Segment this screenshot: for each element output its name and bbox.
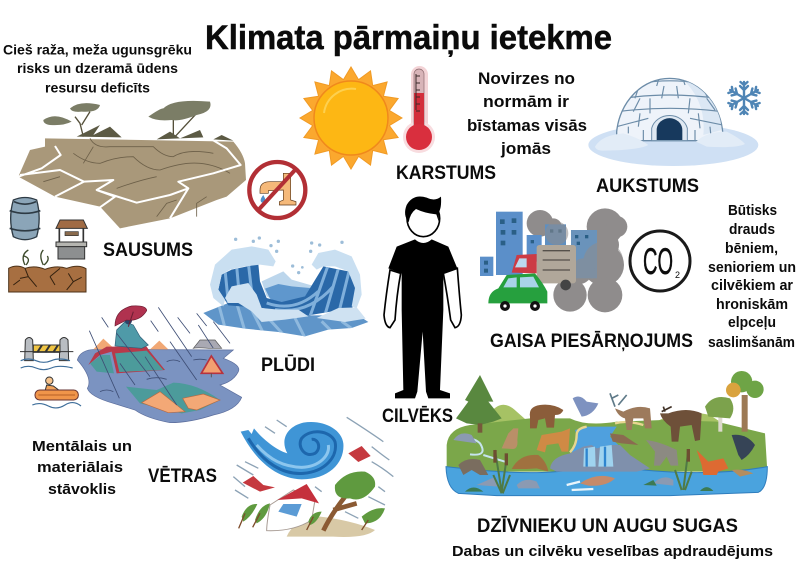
- fir tree: [456, 375, 502, 433]
- illustration: storm with swirl, house and tree: [233, 417, 393, 537]
- title: Klimata pārmaiņu ietekme: [205, 19, 612, 57]
- label: KARSTUMS: KARSTUMS: [396, 163, 496, 184]
- illustration: flooded street with person under umbrella: [77, 306, 242, 423]
- text block: vulnerable groups: cilvēkiem ar: [711, 277, 793, 294]
- icon: dry soil with sprouts: [9, 250, 86, 292]
- icon: CO2 circle: 2: [675, 270, 680, 280]
- label: DZĪVNIEKU UN AUGU SUGAS: DZĪVNIEKU UN AUGU SUGAS: [477, 516, 738, 537]
- text block: mental and material state: [32, 438, 132, 498]
- text block: vulnerable groups: hroniskām: [716, 296, 788, 313]
- icon: road barrier in water: [20, 337, 73, 370]
- icon: igloo: [588, 75, 758, 166]
- text block: deviations: normām ir: [483, 92, 569, 111]
- text block: vulnerable groups: Būtisks: [728, 202, 777, 219]
- text block: deviations: bīstamas visās: [467, 116, 587, 135]
- icon: CO2 circle: [630, 231, 690, 291]
- icon: CO2 circle: CO: [643, 241, 673, 282]
- figure: person: [384, 196, 461, 398]
- text block: vulnerable groups: bēniem,: [725, 240, 778, 257]
- text block: drought effects: Cieš raža, meža ugunsgrēku: [3, 42, 192, 58]
- text block: deviations: [467, 69, 587, 158]
- text block: nature and health threats: Dabas un cilvēku veselības apdraudējums: [452, 543, 773, 560]
- text block: vulnerable groups: drauds: [729, 221, 775, 238]
- icon: snowflake: [728, 82, 760, 114]
- illustration: cracked earth with trees: [18, 101, 246, 228]
- cattails: [493, 449, 692, 493]
- icon: stone well: [56, 220, 87, 259]
- animals: [458, 393, 755, 490]
- label: AUKSTUMS: AUKSTUMS: [596, 176, 699, 197]
- label: VĒTRAS: VĒTRAS: [148, 466, 217, 487]
- illustration: city pollution with car: [480, 208, 627, 312]
- text block: drought effects: risks un dzeramā ūdens: [17, 60, 178, 76]
- illustration: flood wave: [203, 236, 368, 338]
- label: SAUSUMS: SAUSUMS: [103, 240, 193, 261]
- text block: mental and material state: Mentālais un: [32, 438, 132, 455]
- text block: vulnerable groups: saslimšanām: [708, 334, 795, 351]
- label: PLŪDI: PLŪDI: [261, 355, 315, 376]
- text block: deviations: Novirzes no: [478, 69, 575, 88]
- broadleaf trees: [705, 371, 764, 432]
- text block: vulnerable groups: [708, 202, 796, 351]
- text block: drought effects: resursu deficīts: [45, 80, 150, 96]
- icon: water barrel: [10, 197, 40, 240]
- icon: no water tap sign: [249, 162, 305, 218]
- text block: vulnerable groups: senioriem un: [708, 259, 796, 276]
- text block: mental and material state: materiālais: [37, 459, 123, 476]
- text block: drought effects: [3, 42, 192, 96]
- icon: person in rubber boat: [32, 377, 81, 408]
- label: CILVĒKS: CILVĒKS: [382, 406, 453, 427]
- icon: sun: [300, 67, 402, 169]
- text block: deviations: jomās: [500, 139, 551, 158]
- illustration: nature scene with animals: [446, 371, 767, 496]
- text block: vulnerable groups: elpceļu: [728, 314, 776, 331]
- label: GAISA PIESĀRŅOJUMS: GAISA PIESĀRŅOJUMS: [490, 331, 693, 352]
- text block: mental and material state: stāvoklis: [48, 481, 116, 498]
- icon: thermometer: [403, 66, 435, 153]
